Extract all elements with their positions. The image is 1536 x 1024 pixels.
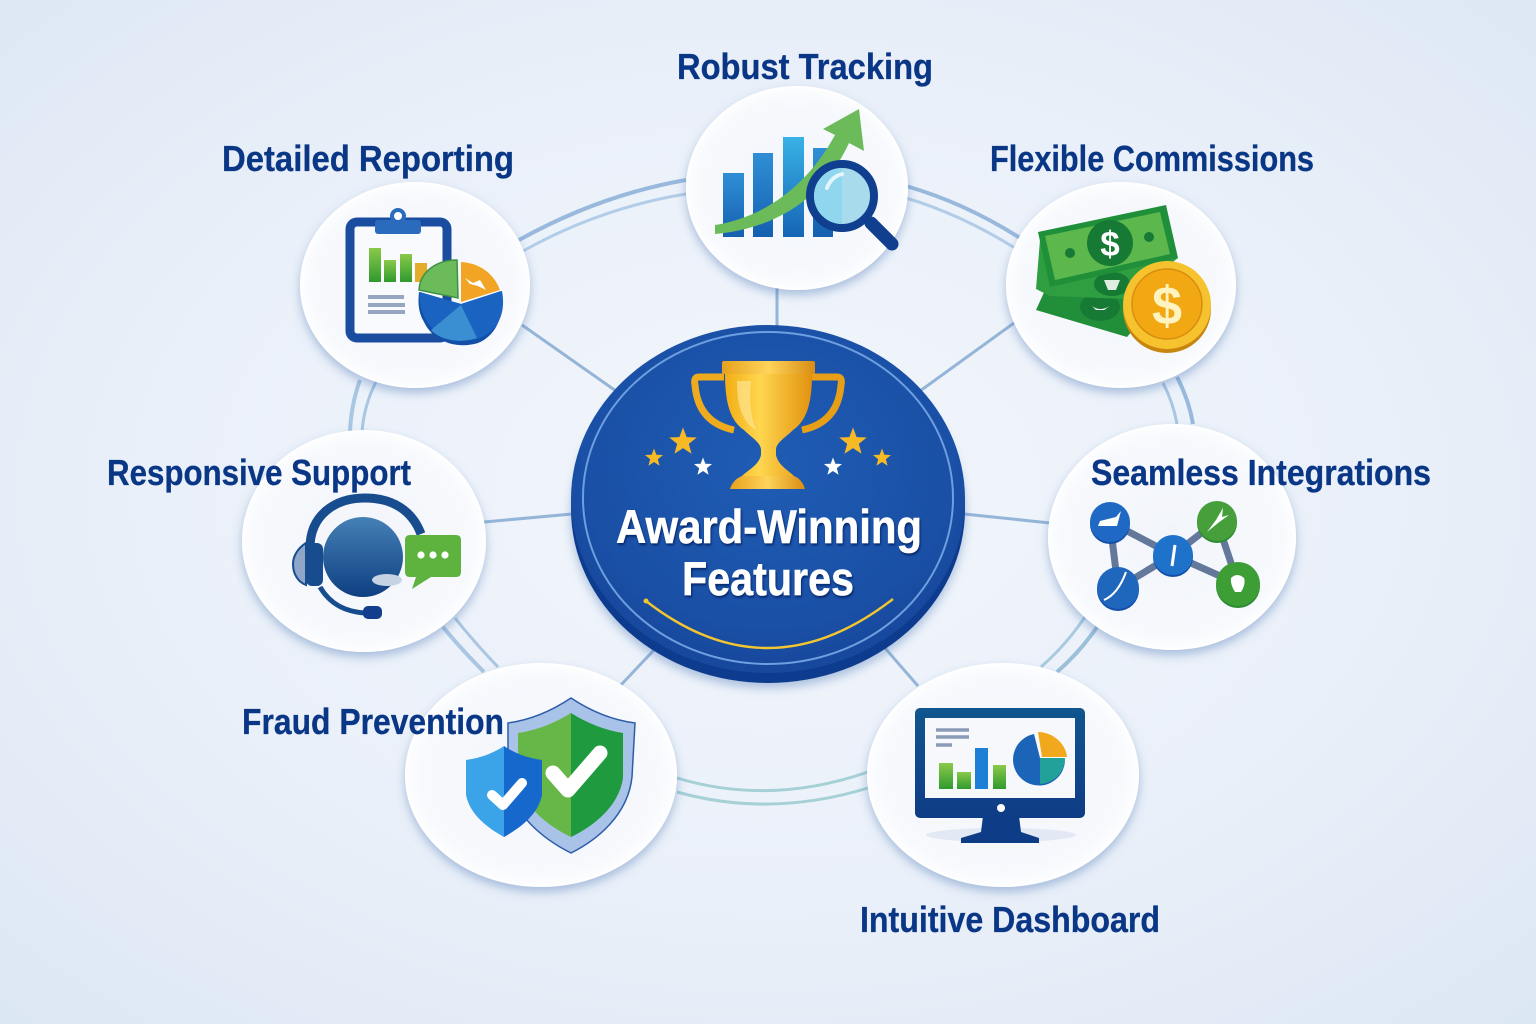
label: flexible commissions: Flexible Commissions xyxy=(990,138,1314,179)
icon: cash and coin xyxy=(1036,205,1211,353)
connector spokes xyxy=(484,288,1050,686)
node: robust tracking xyxy=(687,87,907,289)
label: detailed reporting: Detailed Reporting xyxy=(222,138,514,179)
node: fraud prevention xyxy=(406,664,676,886)
badge title: Features xyxy=(682,552,854,605)
label: robust tracking: Robust Tracking xyxy=(677,46,933,87)
icon: stars xyxy=(645,428,891,475)
icon: dashboard monitor xyxy=(915,708,1085,843)
label: responsive support: Responsive Support xyxy=(107,452,411,493)
label: intuitive dashboard: Intuitive Dashboard xyxy=(860,899,1160,940)
icon: headset and chat bubble xyxy=(293,498,461,619)
icon: growth chart with magnifier xyxy=(715,109,892,244)
icon: trophy xyxy=(695,361,841,489)
icon: cash and coin: $ xyxy=(1152,276,1182,336)
gold swoosh xyxy=(644,598,893,648)
node: seamless integrations xyxy=(1049,425,1295,649)
label: fraud prevention: Fraud Prevention xyxy=(242,701,504,742)
center badge xyxy=(571,325,965,683)
connector ring xyxy=(350,180,1193,804)
node: responsive support xyxy=(243,431,485,651)
label: seamless integrations: Seamless Integrations xyxy=(1091,452,1431,493)
icon: network nodes xyxy=(1090,501,1260,611)
node: intuitive dashboard xyxy=(868,664,1138,886)
icon: shields with check marks xyxy=(466,698,635,853)
icon: clipboard and pie chart xyxy=(350,210,503,345)
badge title: Award-Winning xyxy=(616,500,922,553)
icon: cash and coin: $ xyxy=(1100,225,1120,264)
node: flexible commissions xyxy=(1007,183,1235,387)
node: detailed reporting xyxy=(301,183,529,387)
badge title xyxy=(616,500,922,605)
